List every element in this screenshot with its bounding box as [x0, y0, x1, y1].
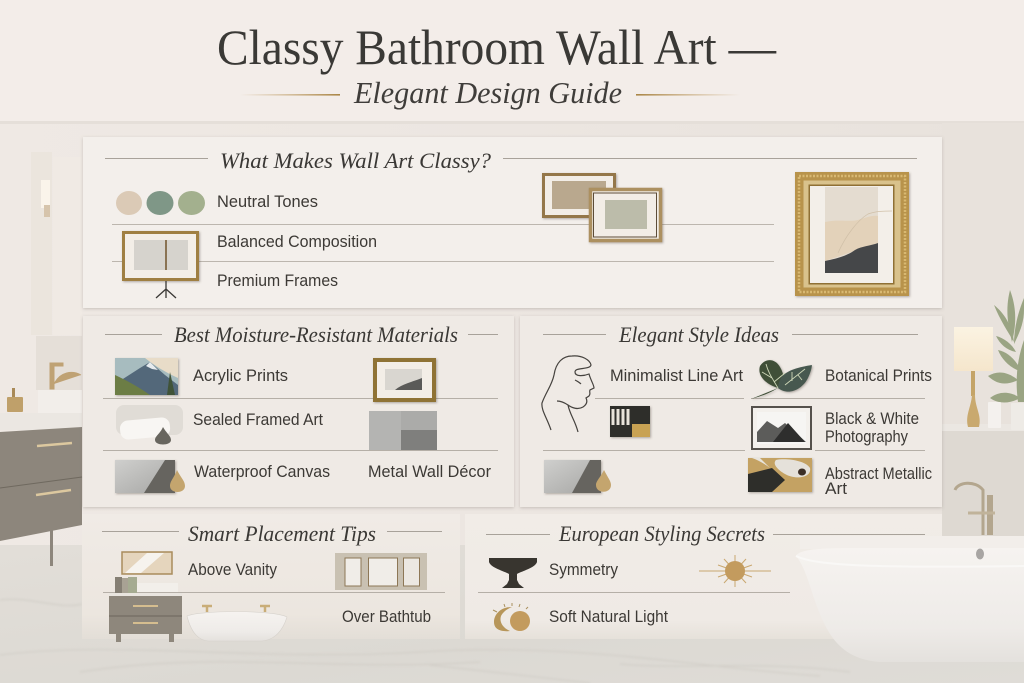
thumbnail: rolled print with drop	[116, 405, 183, 444]
panel: Elegant Style Ideas	[520, 316, 942, 507]
thumbnail: gold frame	[375, 360, 434, 400]
label: Balanced Composition: Balanced Composition	[217, 232, 377, 251]
left vanity scene	[0, 152, 82, 566]
panel: Smart Placement Tips	[82, 514, 460, 642]
icon: woman line art	[542, 356, 594, 432]
thumbnail: black and gold tile	[610, 406, 650, 437]
thumbnail: metal texture	[369, 411, 437, 450]
panel: European Styling Secrets	[465, 514, 942, 639]
small overlapping frames	[544, 174, 660, 240]
color swatches	[116, 191, 205, 215]
large gold framed abstract art	[795, 172, 909, 296]
label: Abstract Metallic Art: Art	[825, 479, 847, 498]
label: Black & White Photography: Black & White	[825, 409, 919, 428]
label: Sealed Framed Art: Sealed Framed Art	[193, 410, 323, 429]
label: Symmetry: Symmetry	[549, 560, 618, 579]
icon: framed art on easel	[124, 232, 198, 298]
header band	[0, 0, 1024, 124]
right shelf scene	[942, 123, 1024, 536]
heading: Best Moisture-Resistant Materials	[174, 322, 458, 347]
heading: What Makes Wall Art Classy?	[220, 148, 491, 173]
label: Waterproof Canvas: Waterproof Canvas	[194, 462, 330, 481]
label: Abstract Metallic Art: Abstract Metallic	[825, 464, 932, 483]
lamp	[954, 327, 993, 427]
icon: botanical leaves	[751, 360, 812, 399]
label: Minimalist Line Art: Minimalist Line Art	[610, 366, 743, 385]
plant	[988, 290, 1024, 402]
icon: symmetry pedestal	[489, 558, 537, 588]
heading: Smart Placement Tips	[188, 521, 376, 546]
faucet	[955, 483, 983, 535]
label: Black & White Photography	[825, 409, 919, 446]
icon: small bathtub	[187, 606, 287, 641]
icon: vanity mirror	[122, 552, 172, 574]
thumbnail: canvas with drop	[544, 460, 611, 493]
panel: What Makes Wall Art Classy?	[83, 137, 942, 308]
label: Above Vanity: Above Vanity	[188, 560, 277, 579]
title: Classy Bathroom Wall Art —	[217, 19, 777, 75]
subtitle: Elegant Design Guide	[353, 75, 622, 110]
label: Soft Natural Light: Soft Natural Light	[549, 607, 668, 626]
label: Metal Wall Décor: Metal Wall Décor	[368, 462, 491, 481]
large bathtub	[796, 536, 1024, 662]
label: Over Bathtub: Over Bathtub	[342, 607, 431, 626]
thumbnail: black and white photo	[752, 407, 811, 449]
icon: soft natural light	[493, 603, 530, 631]
label: Black & White Photography: Photography	[825, 427, 908, 446]
label: Acrylic Prints: Acrylic Prints	[193, 366, 288, 385]
label: Neutral Tones: Neutral Tones	[217, 192, 318, 211]
panel: Best Moisture-Resistant Materials	[83, 316, 514, 507]
thumbnail: waterproof canvas	[115, 460, 185, 493]
heading: Elegant Style Ideas	[618, 322, 779, 347]
thumbnail: abstract metallic	[748, 458, 812, 492]
label: Botanical Prints: Botanical Prints	[825, 366, 932, 385]
label: Premium Frames: Premium Frames	[217, 271, 338, 290]
icon: sun	[699, 555, 771, 587]
label: Abstract Metallic Art	[825, 464, 932, 498]
heading: European Styling Secrets	[558, 521, 765, 546]
thumbnail: mountain acrylic print	[115, 358, 178, 395]
icon: vanity cabinet	[109, 577, 182, 642]
icon: triptych frames	[335, 553, 427, 590]
